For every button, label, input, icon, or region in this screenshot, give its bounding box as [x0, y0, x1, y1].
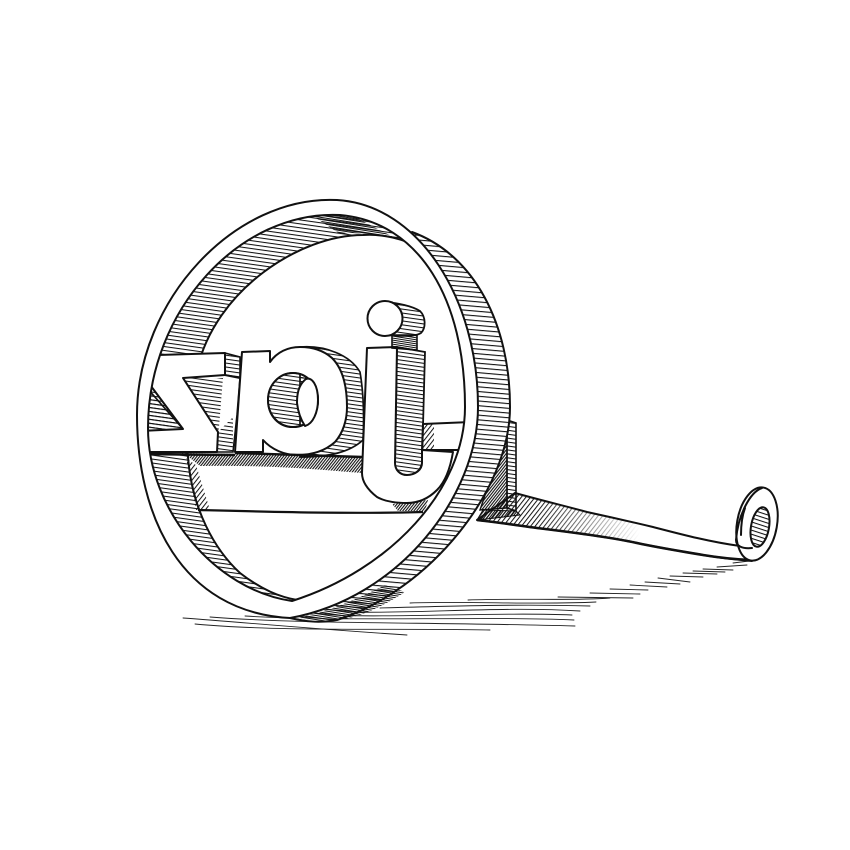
mirrored letter z	[140, 353, 240, 455]
curl inner hole	[748, 506, 772, 548]
interior of the iron	[140, 210, 480, 605]
ground shadow lines	[183, 560, 757, 635]
bracket foot	[477, 510, 520, 520]
dot of j	[368, 301, 425, 350]
outer rim	[137, 200, 478, 618]
curl fold marks	[736, 488, 762, 548]
cast shadow under j	[392, 500, 428, 511]
cast shadow left	[186, 458, 210, 510]
illustration: branding iron	[136, 198, 779, 636]
curl outer	[731, 484, 783, 564]
interior dark shading	[315, 216, 392, 236]
mirrored letter j	[362, 347, 453, 503]
handle hatching	[480, 494, 636, 541]
letter a opening	[297, 379, 318, 426]
hook end of j	[422, 422, 470, 450]
handle with curl	[477, 484, 783, 564]
letter a counter	[268, 373, 318, 427]
bracket	[477, 420, 520, 520]
bracket side	[507, 420, 516, 511]
drum dark shading	[297, 585, 405, 621]
back opening	[187, 235, 480, 600]
drum outer hatched edge	[290, 232, 510, 622]
handle underside line	[477, 520, 750, 560]
inner rim line	[148, 215, 465, 601]
mirrored letter a	[235, 347, 364, 457]
cast shadow under letters	[180, 453, 362, 473]
floor line	[198, 510, 423, 513]
